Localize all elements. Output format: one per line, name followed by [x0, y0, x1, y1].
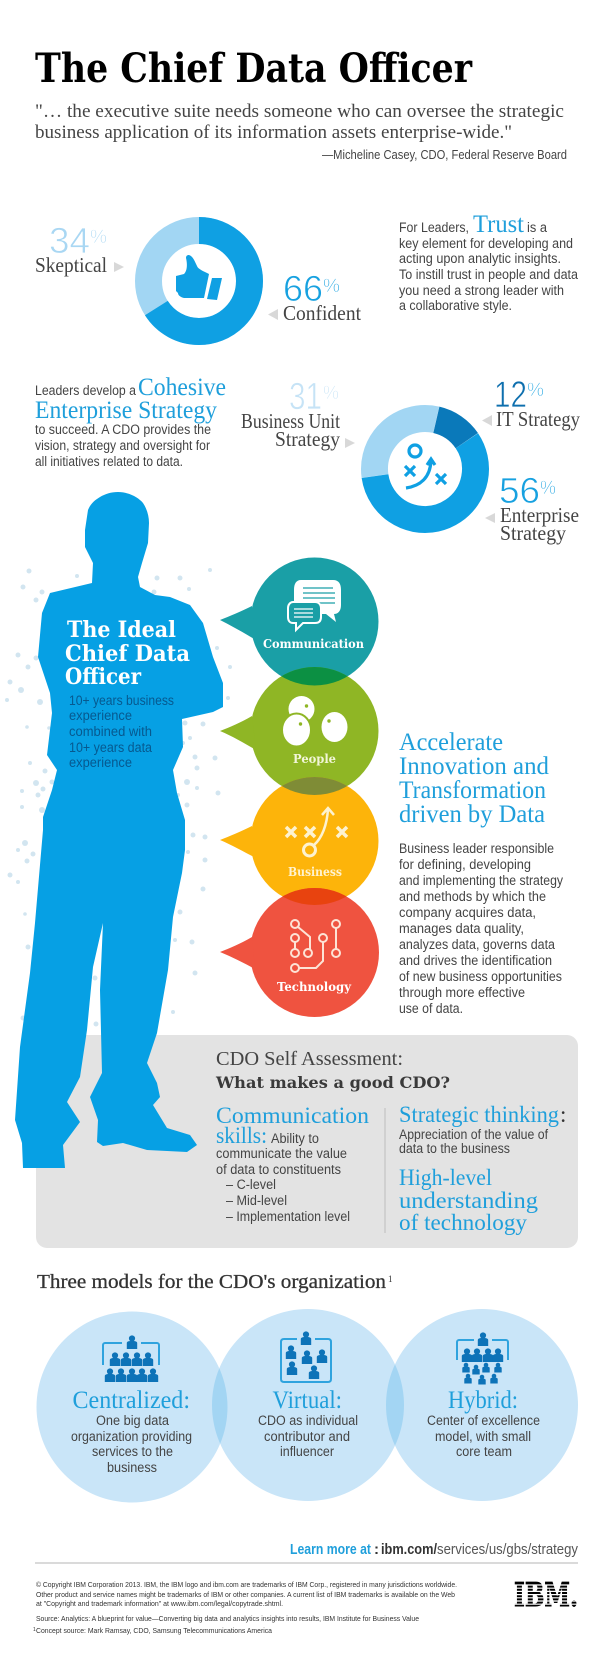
text block: business leader: use of data.	[399, 1001, 463, 1016]
icon: people heads	[282, 696, 348, 746]
column: strategic thinking and technology: :	[560, 1102, 566, 1127]
silhouette text: 10+ years data	[69, 740, 152, 755]
text block: business leader: Business leader responsible	[399, 841, 554, 856]
stat: 12% IT strategy: 12	[494, 374, 527, 415]
stat: 31% business unit strategy: Strategy	[275, 427, 340, 451]
column: strategic thinking and technology: Appreciation of the value of	[399, 1127, 548, 1142]
bubble: communication	[220, 558, 378, 686]
model: hybrid: Hybrid:	[448, 1387, 518, 1414]
icon: virtual org	[281, 1331, 331, 1382]
model: virtual: Virtual:	[272, 1387, 342, 1414]
stat: 66% confident: %	[323, 276, 340, 297]
venn circles: models	[36, 1309, 578, 1502]
text block: cohesive enterprise strategy: Cohesive	[138, 374, 226, 401]
stat: 56% enterprise strategy: 56	[499, 470, 540, 511]
stat: 56% enterprise strategy: Strategy	[500, 521, 566, 545]
bubble: business	[220, 777, 378, 905]
column: strategic thinking and technology: Strategic thinking	[399, 1102, 559, 1127]
footer legal text: Other product and service names might be trademarks of IBM or other companies. A current list of IBM trademarks is available on the Web	[36, 1590, 455, 1599]
text block: trust: For Leaders,	[399, 220, 469, 235]
text block: trust	[399, 211, 578, 313]
heading: three models: Three models for the CDO's organization	[37, 1271, 386, 1293]
model: hybrid: Center of excellence	[427, 1413, 540, 1428]
column: strategic thinking and technology: data to the business	[399, 1141, 510, 1156]
column: strategic thinking and technology: High-level	[399, 1165, 492, 1190]
model: centralized	[71, 1335, 192, 1475]
heading: three models: 1	[388, 1274, 392, 1284]
text block: trust: you need a strong leader with	[399, 283, 564, 298]
model: virtual: contributor and	[264, 1429, 350, 1444]
column: communication skills: Communication	[216, 1103, 370, 1128]
stat: 12% IT strategy	[482, 374, 580, 431]
stat: 66% confident	[268, 268, 361, 325]
stat: 12% IT strategy: IT Strategy	[496, 407, 580, 431]
bubble: people: People	[293, 752, 336, 766]
silhouette text: experience	[69, 755, 132, 770]
stat: 31% business unit strategy	[241, 376, 355, 451]
silhouette heading: Chief Data	[65, 641, 190, 667]
learn more link	[290, 1541, 578, 1558]
icon: thumbs up	[176, 255, 222, 300]
bubble: technology	[220, 888, 379, 1017]
column: strategic thinking and technology	[399, 1102, 566, 1235]
bubble: business: Business	[288, 865, 342, 879]
text block: trust: is a	[527, 220, 547, 235]
column: strategic thinking and technology: understanding	[399, 1188, 539, 1213]
column: communication skills: Ability to	[271, 1131, 319, 1146]
text block: business leader: for defining, developing	[399, 857, 531, 872]
text block: cohesive enterprise strategy: to succeed. A CDO provides the	[35, 422, 211, 437]
bubble: communication: Communication	[263, 637, 364, 651]
text block: cohesive enterprise strategy: Enterprise Strategy	[35, 397, 217, 424]
column: communication skills: – Mid-level	[226, 1193, 287, 1208]
heading: accelerate innovation: Accelerate	[399, 729, 503, 756]
icon: business play	[286, 808, 347, 856]
footer legal text: Source: Analytics: A blueprint for value—Converting big data and analytics insights into results, IBM Institute for Business Value	[36, 1614, 419, 1623]
learn more link: :	[374, 1541, 379, 1558]
text block: cohesive enterprise strategy: all initiatives related to data.	[35, 454, 183, 469]
stat: 56% enterprise strategy: Enterprise	[500, 503, 579, 527]
column: communication skills: – Implementation level	[226, 1209, 350, 1224]
text block: business leader: company acquires data,	[399, 905, 536, 920]
silhouette text: 10+ years business	[69, 693, 174, 708]
stat: 34% skeptical: Skeptical	[35, 253, 107, 277]
learn more link: ibm.com/	[381, 1541, 438, 1558]
column: communication skills: skills:	[216, 1123, 267, 1148]
icon: centralized org	[103, 1335, 159, 1382]
heading: accelerate innovation: Innovation and	[399, 753, 549, 780]
text block: business leader: and drives the identification	[399, 953, 552, 968]
quote attribution: —Micheline Casey, CDO, Federal Reserve Board	[322, 148, 567, 162]
learn more link: Learn more at	[290, 1541, 371, 1558]
bubble: people	[220, 667, 378, 795]
learn more link: services/us/gbs/strategy	[437, 1541, 578, 1558]
text block: trust: acting upon analytic insights.	[399, 251, 561, 266]
silhouette text: combined with	[69, 724, 152, 739]
icon: strategy play	[405, 445, 446, 488]
quote	[35, 102, 564, 143]
heading: accelerate innovation	[399, 729, 549, 828]
stat: 34% skeptical	[35, 220, 124, 277]
model: virtual	[258, 1331, 358, 1459]
panel heading: CDO Self Assessment:	[216, 1048, 403, 1070]
text block: cohesive enterprise strategy: Leaders develop a	[35, 383, 136, 398]
stat: 31% business unit strategy: %	[323, 383, 339, 404]
stat: 56% enterprise strategy: %	[540, 478, 556, 499]
footer legal text: © Copyright IBM Corporation 2013. IBM, the IBM logo and ibm.com are trademarks of IBM Corp., registered in many jurisdictions worldwide.	[36, 1580, 457, 1589]
silhouette text	[69, 693, 174, 770]
text block: business leader: analyzes data, governs data	[399, 937, 555, 952]
title: The Chief Data Officer	[35, 45, 473, 92]
heading: accelerate innovation: driven by Data	[399, 801, 545, 828]
column: communication skills: – C-level	[226, 1177, 276, 1192]
footer legal text: Concept source: Mark Ramsay, CDO, Samsung Telecommunications America	[36, 1626, 273, 1635]
text block: business leader: and methods by which the	[399, 889, 546, 904]
stat: 31% business unit strategy: Business Unit	[241, 409, 340, 433]
icon: hybrid org	[457, 1332, 508, 1384]
model: virtual: CDO as individual	[258, 1413, 358, 1428]
text block: trust: a collaborative style.	[399, 298, 512, 313]
model: centralized: services to the	[92, 1444, 173, 1459]
quote: "… the executive suite needs someone who can oversee the strategic	[35, 102, 564, 122]
panel: CDO self assessment	[36, 1035, 578, 1248]
panel: CDO self assessment: What makes a good CDO?	[215, 1073, 450, 1092]
column: communication skills	[216, 1103, 370, 1224]
text block: business leader: through more effective	[399, 985, 525, 1000]
text block: cohesive enterprise strategy	[35, 374, 226, 469]
model: hybrid: model, with small	[435, 1429, 531, 1444]
heading: accelerate innovation: Transformation	[399, 777, 546, 804]
model: centralized: organization providing	[71, 1429, 192, 1444]
stat: 56% enterprise strategy	[485, 470, 579, 545]
column: strategic thinking and technology: of technology	[399, 1210, 528, 1235]
donut chart: trust	[148, 230, 250, 332]
model: hybrid	[427, 1332, 540, 1459]
silhouette: ideal chief data officer	[15, 492, 223, 1168]
stat: 31% business unit strategy: 31	[289, 376, 322, 418]
footer legal text	[33, 1580, 457, 1635]
stat: 66% confident: Confident	[283, 301, 361, 325]
silhouette text: experience	[69, 708, 132, 723]
text block: trust: To instill trust in people and data	[399, 267, 578, 282]
IBM logo: IBM.	[514, 1575, 578, 1614]
text block: business leader: of new business opportunities	[399, 969, 562, 984]
text block: trust: Trust	[473, 211, 524, 238]
text block: business leader: manages data quality,	[399, 921, 524, 936]
stat: 34% skeptical: 34	[49, 220, 90, 261]
silhouette heading	[65, 617, 190, 690]
model: virtual: influencer	[280, 1444, 334, 1459]
model: centralized: Centralized:	[72, 1387, 190, 1414]
footer legal text: at "Copyright and trademark information" at www.ibm.com/legal/copytrade.shtml.	[36, 1599, 283, 1608]
model: hybrid: core team	[456, 1444, 512, 1459]
bubble: technology: Technology	[277, 980, 352, 994]
donut chart: strategy	[355, 399, 495, 539]
text block: cohesive enterprise strategy: vision, strategy and oversight for	[35, 438, 210, 453]
silhouette heading: Officer	[65, 664, 141, 690]
icon: circuit	[291, 920, 340, 972]
text block: trust: key element for developing and	[399, 236, 573, 251]
text block: business leader	[399, 841, 563, 1016]
quote: business application of its information assets enterprise-wide."	[35, 123, 512, 143]
footer legal text: 1	[33, 1627, 36, 1633]
column: communication skills: communicate the value	[216, 1146, 347, 1161]
column: communication skills: of data to constituents	[216, 1162, 341, 1177]
text block: business leader: and implementing the strategy	[399, 873, 563, 888]
stat: 34% skeptical: %	[90, 227, 107, 248]
stat: 12% IT strategy: %	[527, 380, 544, 401]
model: centralized: One big data	[96, 1413, 169, 1428]
silhouette heading: The Ideal	[67, 617, 176, 643]
stat: 66% confident: 66	[283, 268, 323, 309]
icon: speech bubbles	[288, 580, 341, 630]
model: centralized: business	[107, 1460, 157, 1475]
